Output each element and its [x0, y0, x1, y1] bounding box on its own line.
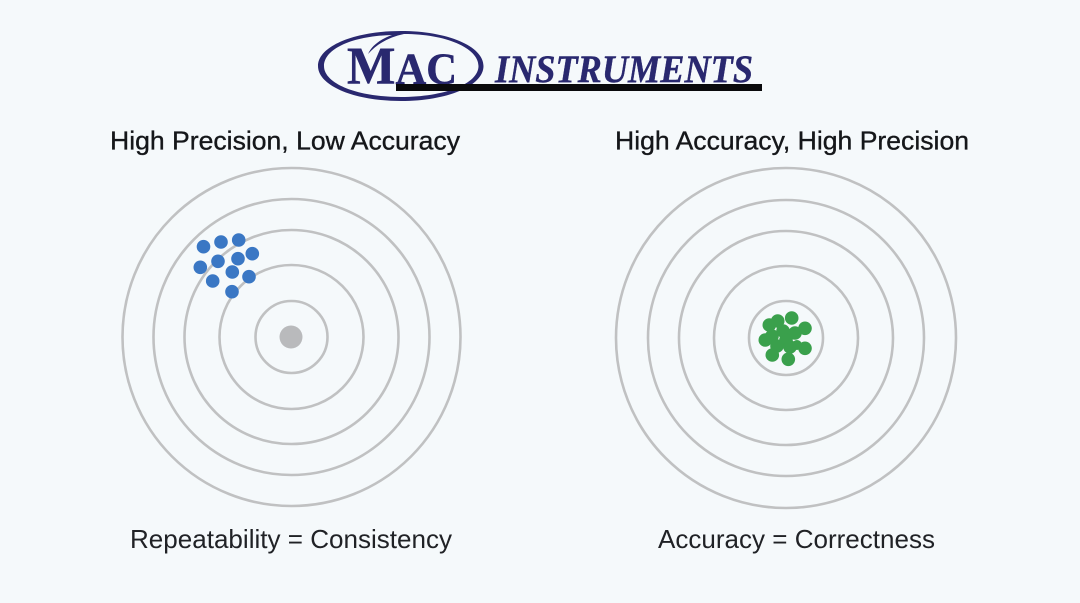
- caption: accuracy: Accuracy = Correctness: [658, 524, 935, 554]
- green shot cluster: [758, 311, 812, 366]
- target: left: [122, 168, 460, 506]
- heading: high precision low accuracy: High Precision, Low Accuracy: [110, 126, 460, 156]
- heading: high accuracy high precision: High Accuracy, High Precision: [615, 126, 969, 156]
- target: right: [616, 168, 956, 508]
- logo wordmark MAC: MAC: [347, 38, 457, 96]
- logo oval: [318, 31, 484, 101]
- logo underline bar: [396, 84, 762, 91]
- target centre: [280, 326, 302, 348]
- logo wordmark INSTRUMENTS: INSTRUMENTS: [494, 48, 753, 91]
- blue shot cluster: [194, 233, 259, 299]
- logo: MAC Instruments: [318, 31, 762, 101]
- caption: repeatability: Repeatability = Consistency: [130, 524, 452, 554]
